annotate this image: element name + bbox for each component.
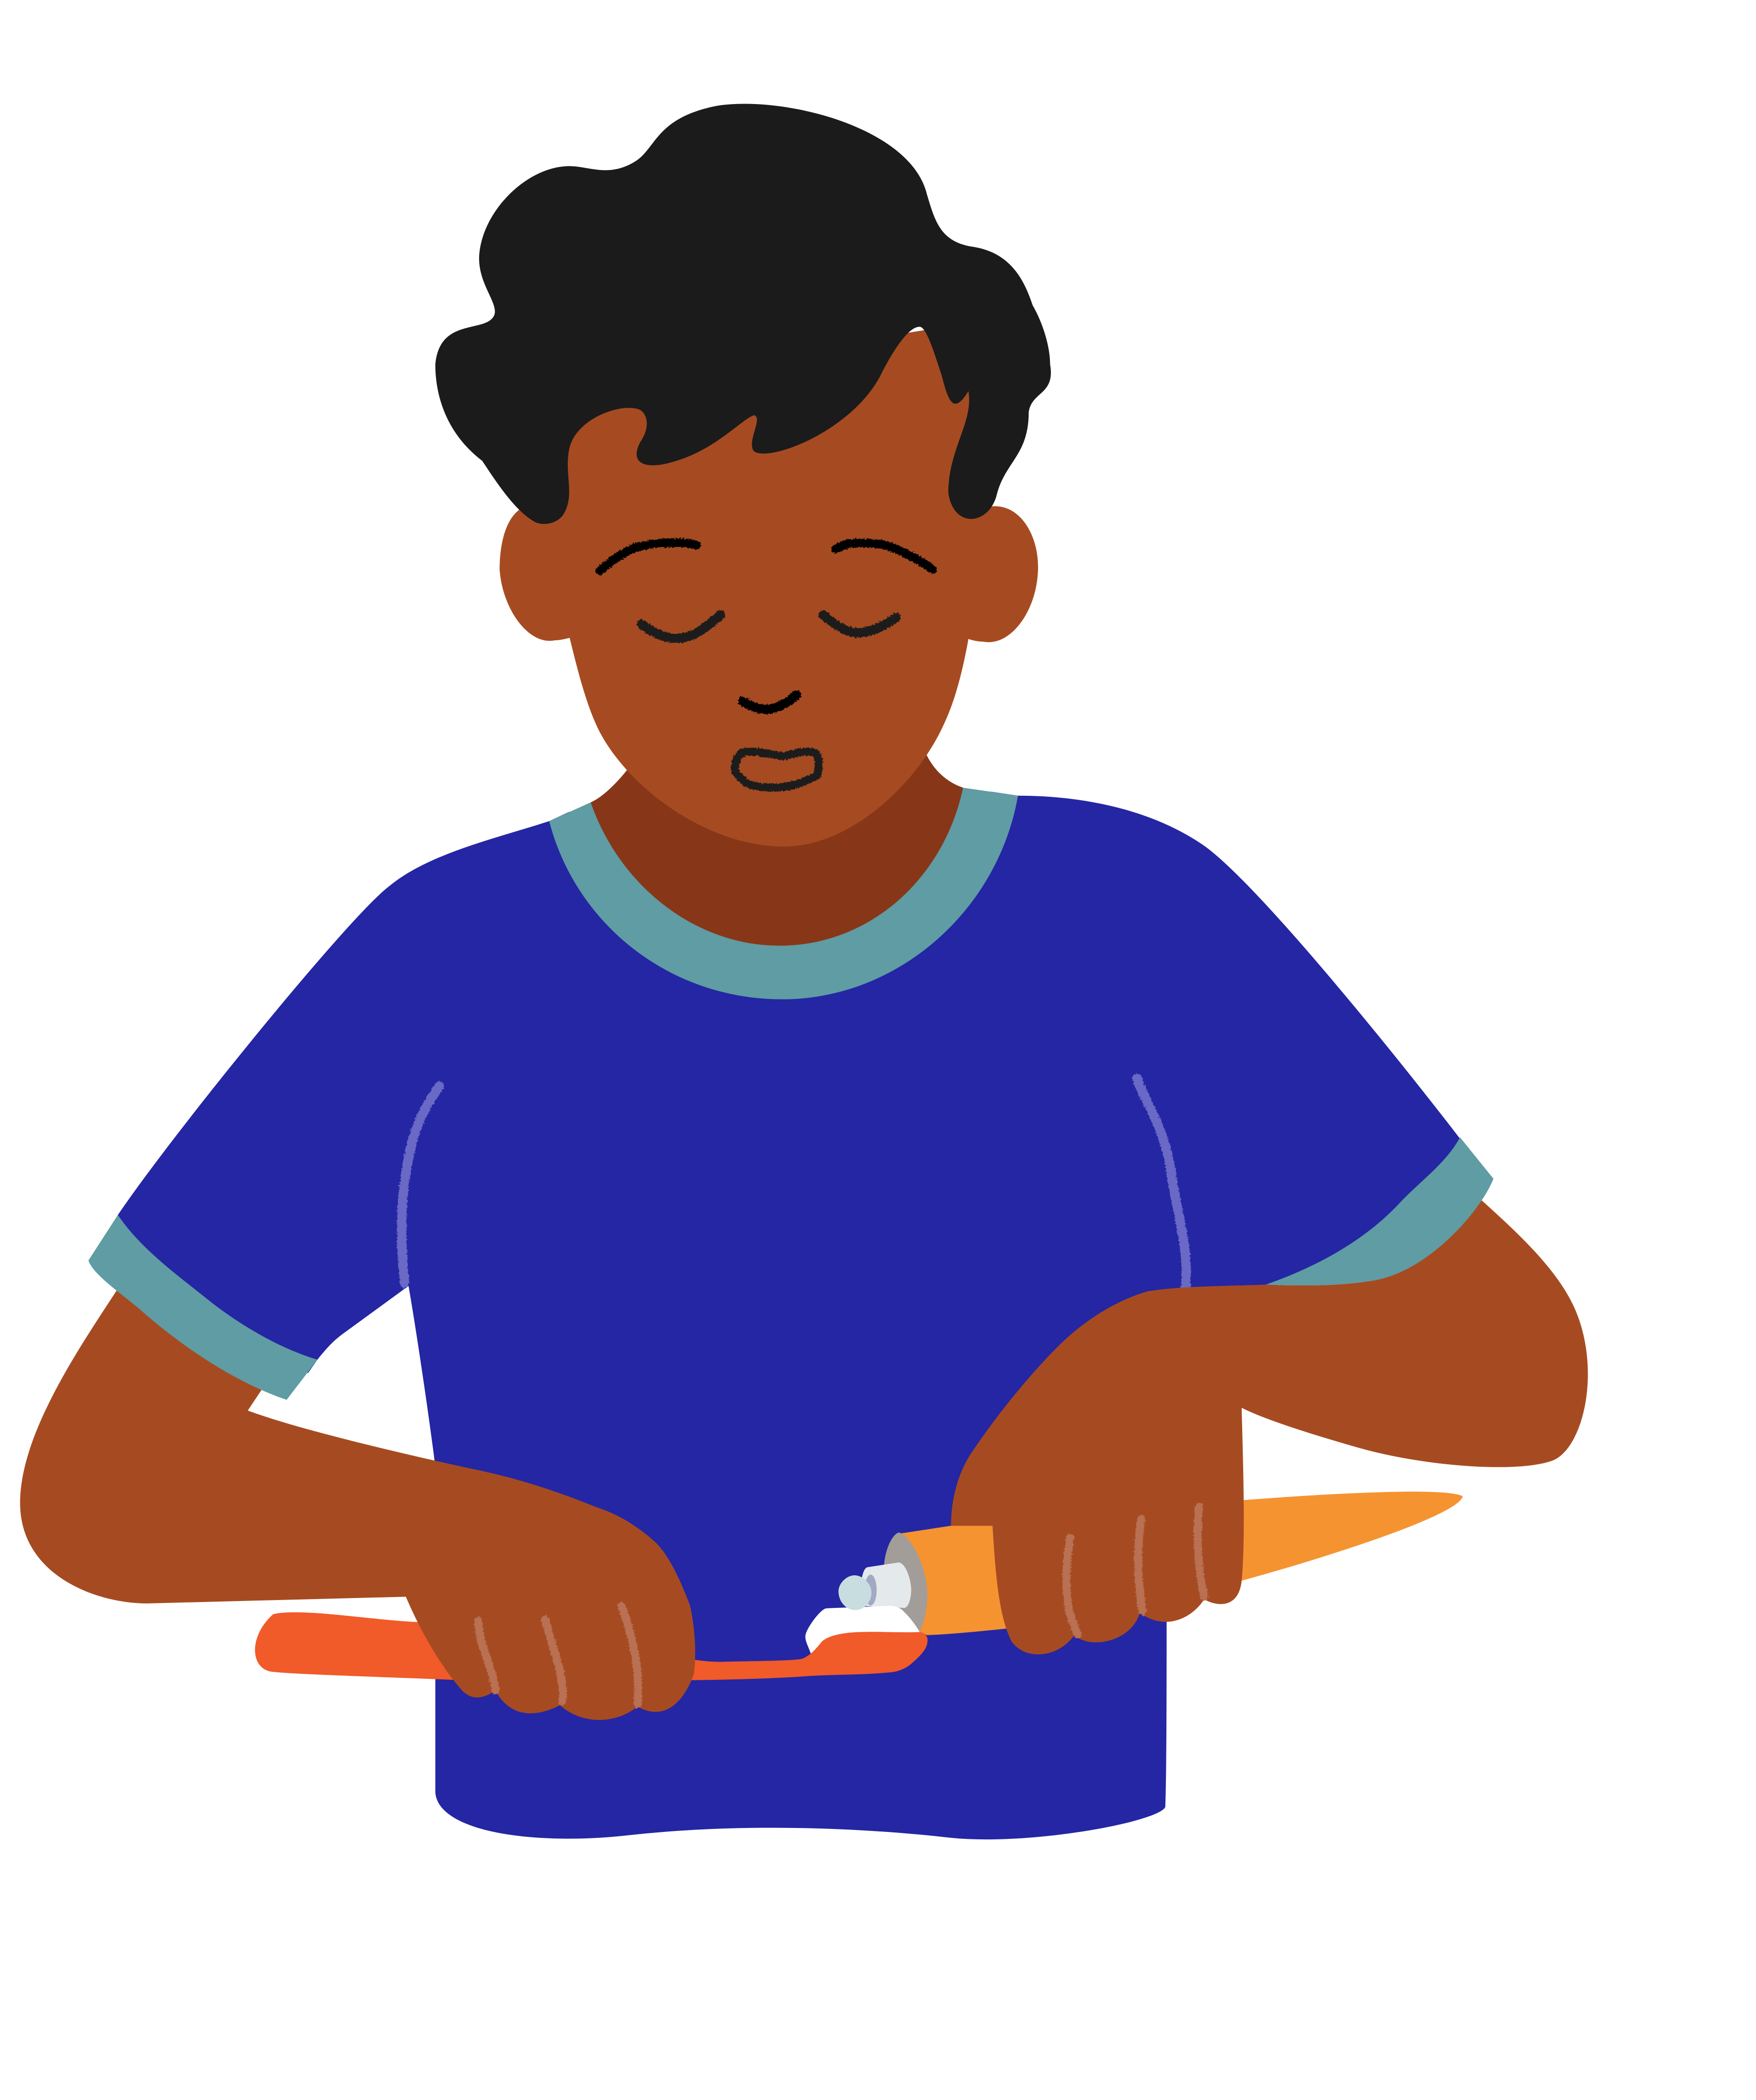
shirt [112, 792, 1463, 1839]
ears [499, 496, 1038, 642]
mouth [735, 752, 819, 788]
nose [743, 695, 796, 709]
shirt wrinkles [402, 1078, 1186, 1289]
right wrinkle [1137, 1078, 1186, 1289]
paste drop [838, 1575, 872, 1610]
facial features [600, 543, 932, 788]
tube opening [865, 1575, 877, 1605]
toothpaste tube [861, 1492, 1463, 1635]
tube body [899, 1492, 1463, 1635]
right eyebrow [836, 543, 932, 569]
hair [436, 104, 1051, 524]
right ear [944, 506, 1038, 642]
right hand finger lines [1066, 1507, 1204, 1634]
right arm and hand [951, 1137, 1588, 1655]
tube cap [861, 1562, 911, 1608]
left eyelid [642, 615, 720, 638]
left sleeve cuff [88, 1215, 318, 1400]
left sleeve cuff and arm [20, 1215, 695, 1720]
left ear [499, 496, 589, 641]
left eyebrow [600, 543, 697, 571]
left wrinkle [402, 1086, 439, 1283]
left arm and hand [20, 1272, 695, 1720]
right sleeve cuff [1266, 1137, 1493, 1285]
left hand finger lines [478, 1606, 638, 1704]
face [562, 322, 978, 847]
shirt collar [549, 788, 1018, 999]
right arm [951, 1199, 1588, 1655]
toothpaste squeezed onto brush [805, 1606, 924, 1661]
right eyelid [823, 615, 896, 633]
toothbrush [255, 1612, 928, 1680]
neck [576, 753, 971, 978]
tube shoulder [884, 1533, 928, 1632]
